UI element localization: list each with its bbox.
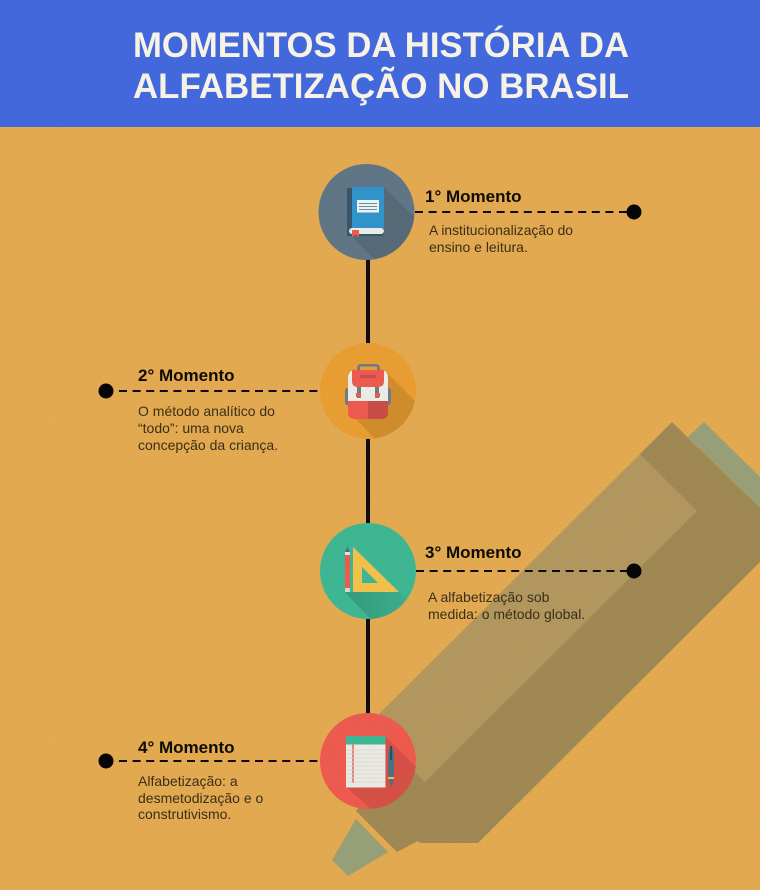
text: moment 2 <box>138 366 278 453</box>
text: moment 4: construtivismo. <box>138 806 231 822</box>
text: moment 2: 2° Momento <box>138 366 235 385</box>
connector: moment 3 <box>416 564 642 578</box>
timeline <box>366 255 370 720</box>
pencil illustration <box>332 422 760 876</box>
icon: circle with book <box>318 164 414 260</box>
title: MOMENTOS DA HISTÓRIA DA <box>133 25 629 65</box>
text: moment 4: 4° Momento <box>138 738 235 757</box>
text: moment 3: 3° Momento <box>425 543 522 562</box>
icon: circle with backpack <box>320 343 416 439</box>
text: moment 2: “todo”: uma nova <box>138 420 244 436</box>
text: moment 1 <box>425 187 573 255</box>
header band <box>0 0 760 127</box>
text: moment 4: Alfabetização: a <box>138 773 238 789</box>
text: moment 1: A institucionalização do <box>429 222 573 238</box>
title <box>133 25 629 106</box>
text: moment 3 <box>425 543 585 622</box>
text: moment 3: medida: o método global. <box>428 606 585 622</box>
text: moment 3: A alfabetização sob <box>428 589 550 605</box>
text: moment 2: O método analítico do <box>138 403 275 419</box>
text: moment 2: concepção da criança. <box>138 437 278 453</box>
text: moment 4 <box>138 738 264 822</box>
icon: circle with notepad and pen <box>320 713 416 809</box>
title: ALFABETIZAÇÃO NO BRASIL <box>133 67 629 106</box>
text: moment 1: ensino e leitura. <box>429 239 528 255</box>
text: moment 1: 1° Momento <box>425 187 522 206</box>
connector: moment 2 <box>98 384 320 398</box>
connector: moment 4 <box>98 754 320 768</box>
text: moment 4: desmetodização e o <box>138 790 264 806</box>
connector: moment 1 <box>415 204 642 220</box>
icon: circle with set square and pencil <box>320 523 416 619</box>
